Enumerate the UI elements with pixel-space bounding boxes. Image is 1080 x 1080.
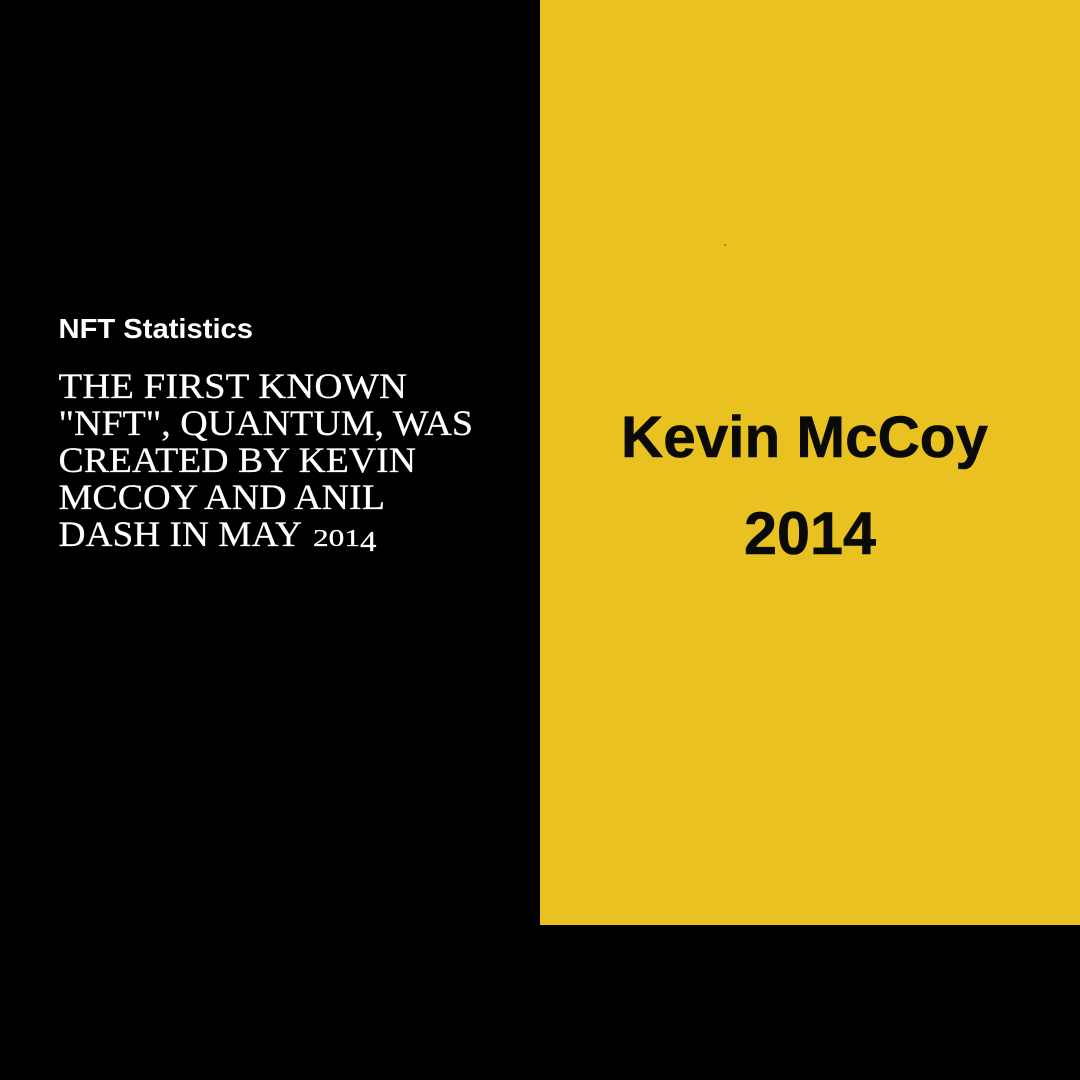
- text block: first known NFT fact: 4: [360, 526, 377, 558]
- text block: first known NFT fact: "NFT", QUANTUM, WAS: [58, 403, 473, 443]
- text block: first known NFT fact: THE FIRST KNOWN: [58, 366, 407, 406]
- text block: first known NFT fact: [58, 366, 473, 558]
- callout: Kevin McCoy 2014: [621, 405, 988, 567]
- panel: yellow block: [540, 0, 1080, 925]
- callout: Kevin McCoy 2014: 2014: [744, 500, 877, 567]
- text block: first known NFT fact: CREATED BY KEVIN: [58, 440, 416, 480]
- text block: first known NFT fact: 201: [313, 526, 360, 552]
- heading: NFT Statistics: NFT Statistics: [58, 313, 253, 344]
- text block: first known NFT fact: DASH IN MAY: [58, 514, 302, 554]
- text block: first known NFT fact: MCCOY AND ANIL: [58, 477, 385, 517]
- callout: Kevin McCoy 2014: Kevin McCoy: [621, 405, 988, 470]
